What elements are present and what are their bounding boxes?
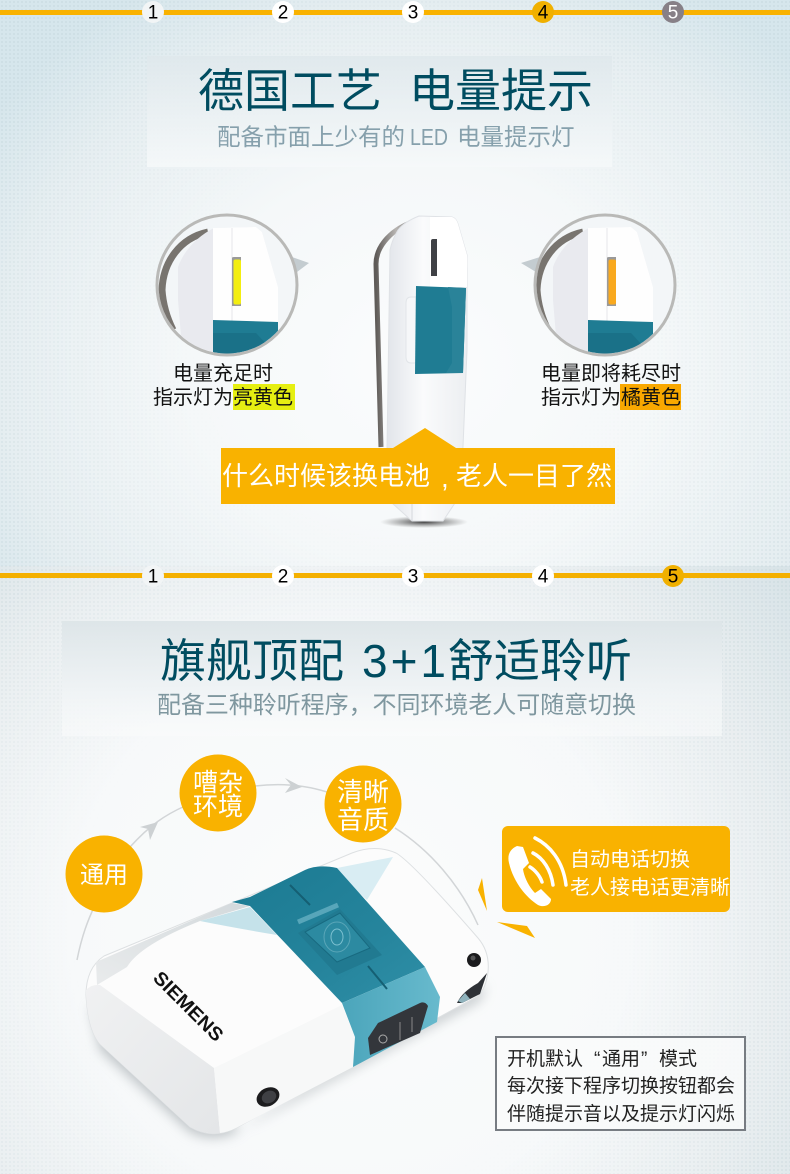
note box: default mode: “ — [594, 1049, 600, 1070]
teal band — [232, 866, 425, 1003]
callout: automatic phone switching — [502, 826, 730, 912]
heading: 德国工艺 — [198, 65, 382, 117]
step navigation: top: 5 — [668, 2, 678, 24]
body — [86, 848, 488, 1134]
background: lower section — [0, 566, 790, 1174]
label: full battery: 指示灯为亮黄色 — [153, 386, 293, 409]
program: noisy environment: 环境 — [193, 793, 243, 821]
step navigation: middle: 3 — [408, 566, 418, 588]
note box: default mode: ” — [641, 1049, 647, 1070]
subheading: LED — [410, 124, 448, 150]
callout: when to change battery — [221, 428, 615, 504]
program button — [298, 909, 382, 975]
note box: default mode: 伴随提示音以及提示灯闪烁 — [507, 1103, 735, 1125]
heading: 舒适聆听 — [448, 635, 632, 687]
label: full battery: 电量充足时 — [173, 362, 273, 385]
title panel: listening programs — [62, 621, 722, 736]
step navigation: top: 2 — [278, 2, 288, 24]
program: noisy environment — [180, 754, 256, 832]
step navigation: middle: 1 — [148, 566, 158, 588]
callout: when to change battery: , — [441, 462, 449, 493]
subheading: 电量提示灯 — [457, 124, 574, 150]
zoom circle: full battery — [157, 215, 297, 360]
arrow: left pointer — [292, 257, 309, 272]
program: general: 通用 — [80, 862, 128, 889]
step navigation: middle: 2 — [278, 566, 288, 588]
reflection — [200, 907, 277, 935]
zoom circle: low battery — [535, 215, 675, 360]
step navigation: middle — [0, 565, 790, 588]
arrow: right pointer — [521, 257, 540, 272]
step navigation: middle: 5 — [668, 566, 678, 588]
accents: signal shards — [478, 878, 535, 938]
heading: 3+1 — [362, 635, 446, 687]
program: clear sound — [324, 766, 402, 842]
title panel: battery indicator — [147, 56, 612, 167]
shadow — [90, 985, 486, 1138]
callout: when to change battery: 什么时候该换电池 — [222, 461, 430, 491]
heading — [160, 635, 632, 687]
note box: default mode: 每次接下程序切换按钮都会 — [507, 1075, 735, 1097]
callout: automatic phone switching: 自动电话切换 — [570, 848, 690, 871]
upper edge shading — [96, 903, 250, 985]
heading: 电量提示 — [409, 65, 593, 117]
left facet — [86, 985, 220, 1133]
program: general — [66, 836, 142, 912]
step navigation: top — [0, 1, 790, 24]
step navigation: top: 1 — [148, 2, 158, 24]
callout: automatic phone switching: 老人接电话更清晰 — [570, 876, 730, 899]
front facet — [214, 1005, 355, 1133]
microphone — [467, 953, 481, 967]
program: noisy environment: 嘈杂 — [193, 769, 243, 797]
heading: 旗舰顶配 — [160, 635, 344, 687]
audio jack — [253, 1083, 283, 1111]
program: clear sound: 音质 — [337, 805, 389, 835]
label: low battery — [541, 362, 681, 410]
heading — [198, 65, 593, 117]
program: clear sound: 清晰 — [337, 777, 389, 807]
step navigation: top: 4 — [538, 2, 549, 24]
step navigation: top: 3 — [408, 2, 418, 24]
callout: when to change battery: 老人一目了然 — [456, 461, 612, 491]
step navigation: middle: 4 — [538, 566, 549, 588]
note box: default mode: 开机默认 — [507, 1048, 583, 1070]
subheading: 配备市面上少有的 — [217, 124, 405, 150]
switch — [368, 1002, 428, 1055]
label: full battery — [153, 362, 295, 410]
subheading — [217, 124, 574, 150]
label: low battery: 电量即将耗尽时 — [541, 362, 681, 385]
device: side view — [376, 216, 468, 528]
note box: default mode: 通用 — [602, 1048, 640, 1070]
icon: phone with signal — [508, 838, 566, 906]
subheading: 配备三种聆听程序，不同环境老人可随意切换 — [157, 692, 636, 719]
device: hearing aid top view — [86, 848, 488, 1138]
note box: default mode: 模式 — [659, 1048, 697, 1070]
program flow arcs and arrows — [77, 778, 478, 960]
note box: default mode — [496, 1037, 745, 1130]
background: upper section — [0, 0, 790, 566]
brand: SIEMENS — [148, 968, 227, 1046]
label: low battery: 指示灯为橘黄色 — [541, 386, 681, 409]
